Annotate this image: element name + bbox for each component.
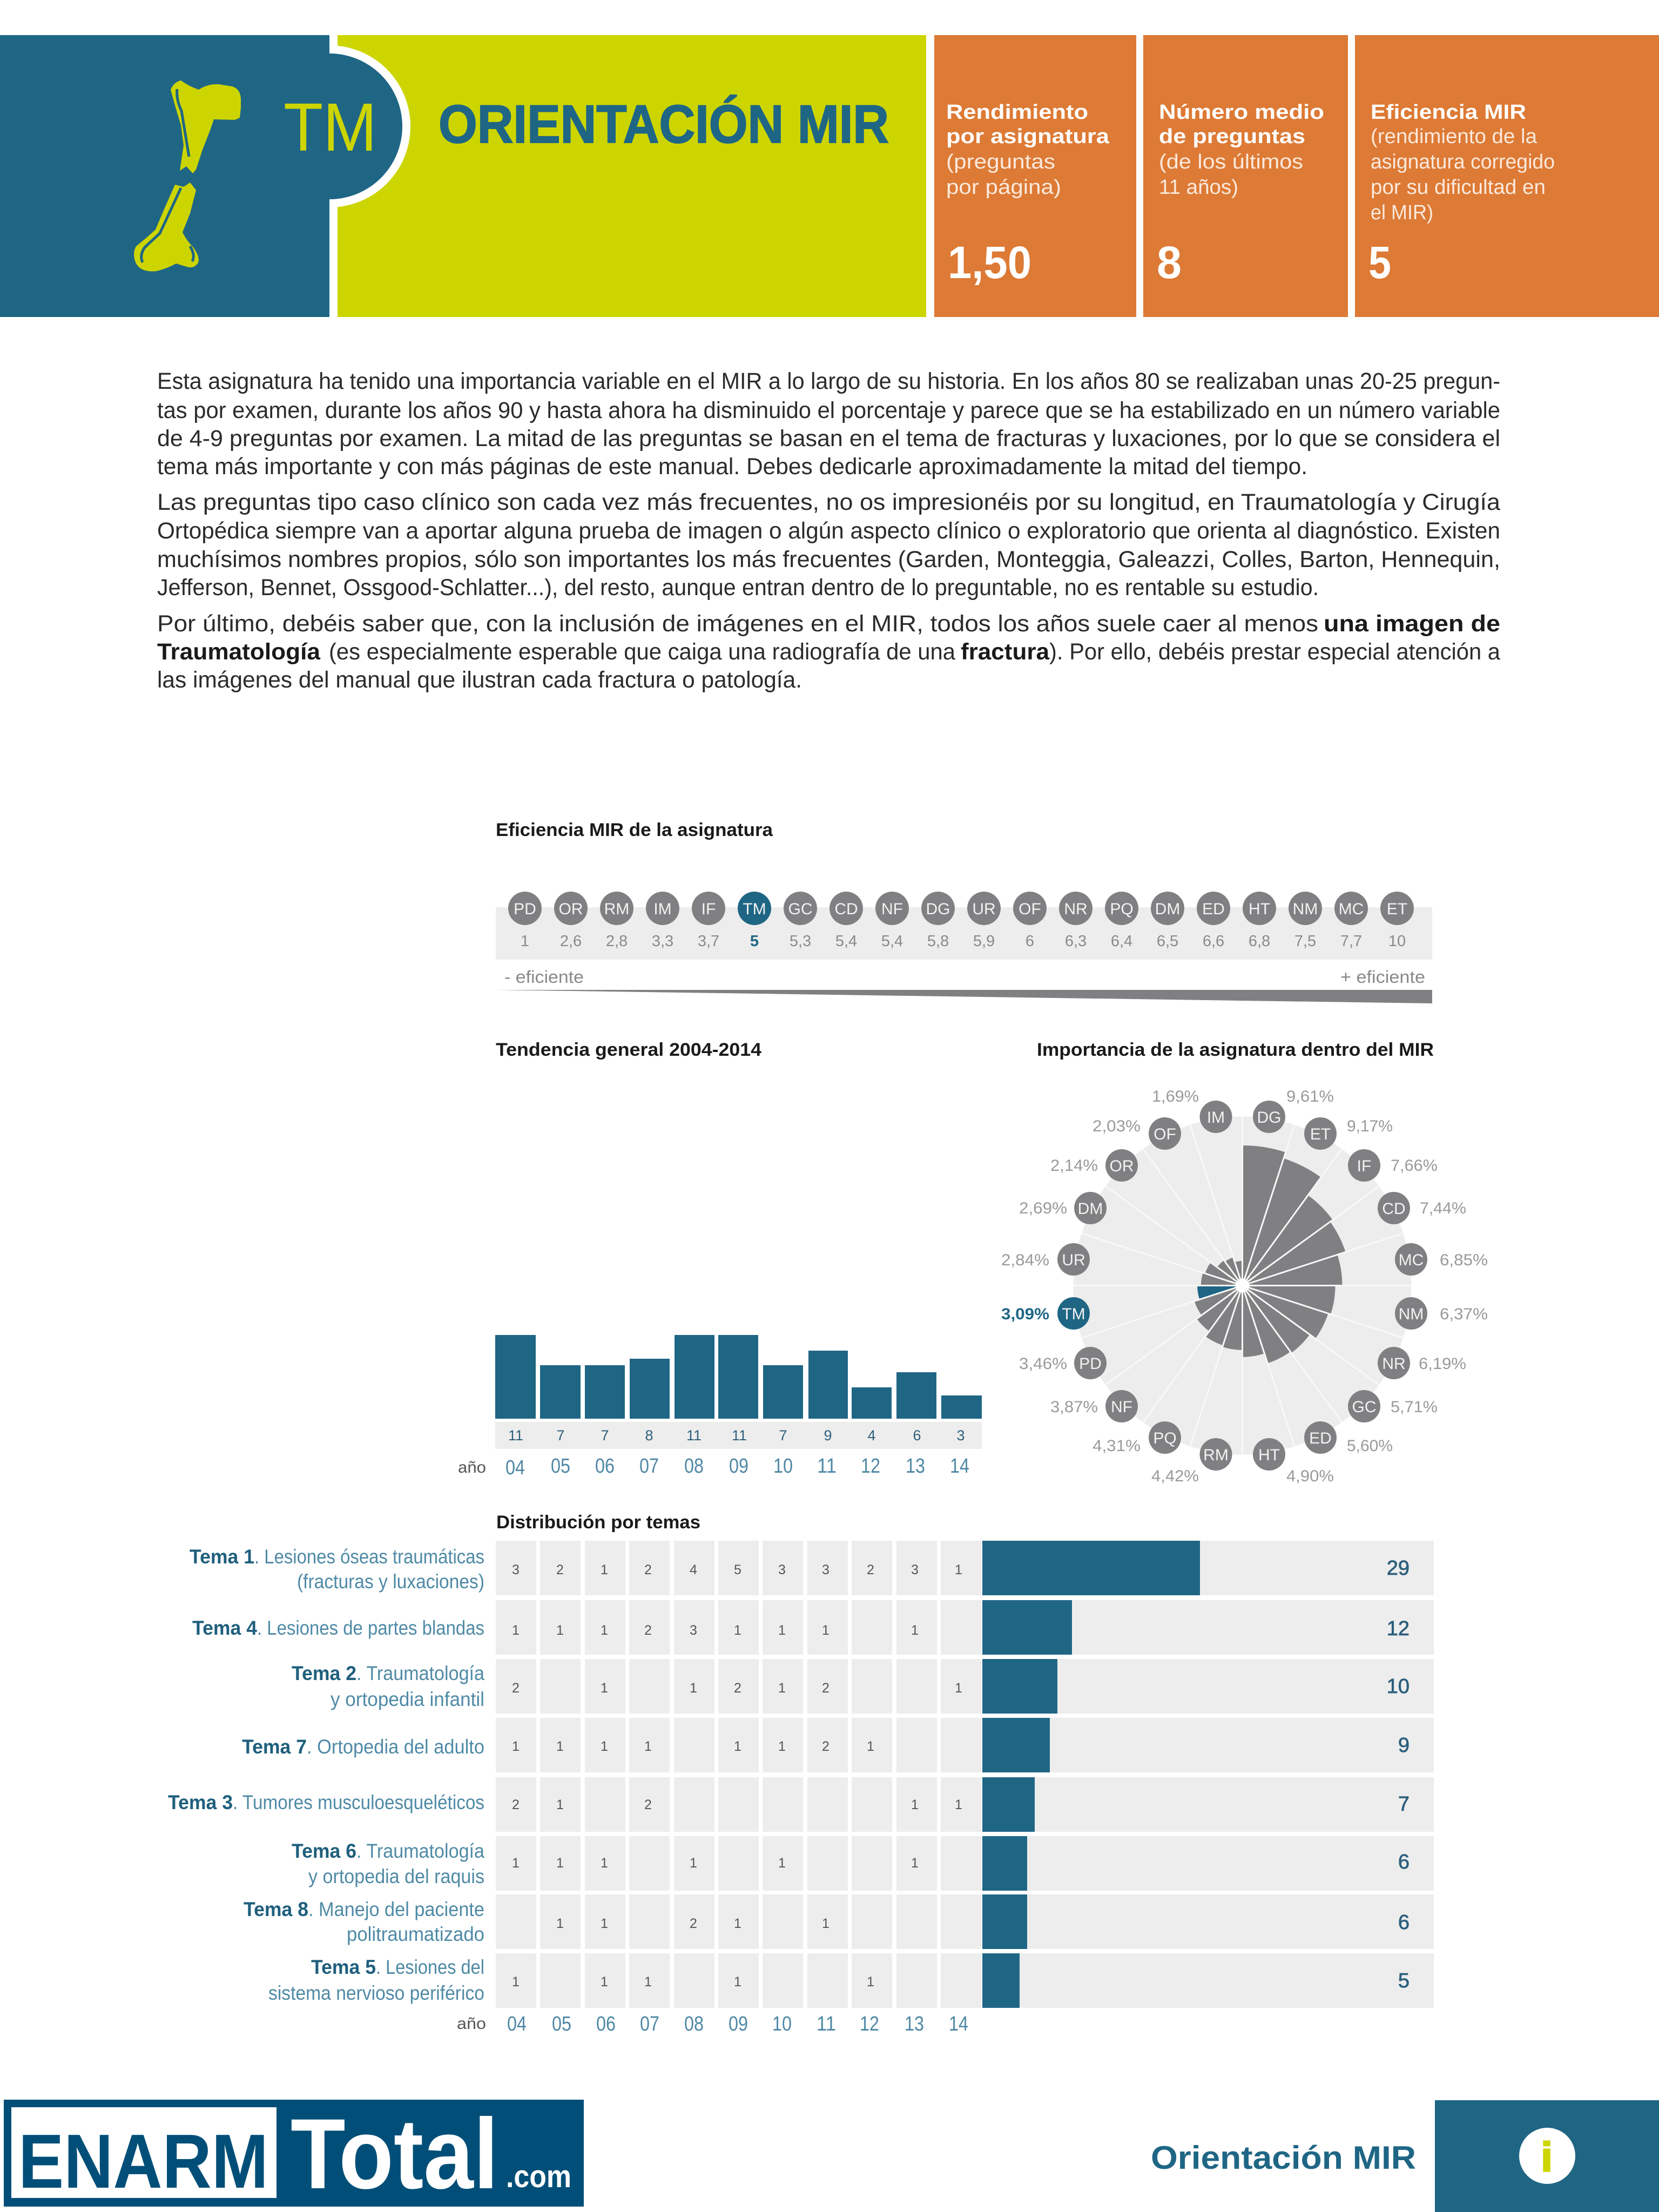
panel: rendimiento por asignatura (934, 35, 1136, 317)
grid numbers: 2 (822, 1739, 830, 1754)
year axis: 12 (861, 1455, 880, 1478)
scale band with subject circles: HT (1249, 900, 1270, 918)
bar chart (495, 1335, 982, 1419)
efficiency values: 1 (521, 933, 529, 950)
topic labels: . Lesiones de partes blandas (257, 1617, 484, 1639)
polar chart percentages: 6,85% (1440, 1251, 1488, 1269)
grid numbers: 2 (556, 1562, 564, 1577)
topic labels: . Ortopedia del adulto (307, 1736, 484, 1758)
topic labels: Tema 6 (292, 1840, 356, 1862)
grid numbers: 1 (778, 1623, 786, 1638)
year axis (458, 1455, 969, 1479)
year axis: 08 (684, 1455, 704, 1478)
paragraph 3: fractura (961, 639, 1050, 665)
polar chart subject circles: MC (1399, 1251, 1424, 1269)
year axis: 05 (552, 2013, 571, 2035)
polar chart percentages: 6,19% (1419, 1355, 1466, 1373)
efficiency values: 6,8 (1249, 933, 1270, 950)
polar chart subject circles: GC (1352, 1398, 1376, 1416)
polar chart percentages: 3,09% (1001, 1305, 1049, 1323)
paragraph 1: tema más importante y con más páginas de este manual. Debes dedicarle aproximadamente la mitad del tiempo. (157, 454, 1307, 480)
paragraph 3: una imagen de (1324, 611, 1500, 637)
logo: ENARM Total .com: .com (506, 2159, 571, 2194)
polar chart percentages: 2,84% (1001, 1251, 1049, 1269)
grid numbers: 1 (955, 1681, 962, 1696)
paragraph 3: ). Por ello, debéis prestar especial atención a (1049, 639, 1500, 665)
polar chart subject circles: OR (1109, 1157, 1134, 1175)
scale band with subject circles: GC (788, 900, 812, 918)
grid numbers: 2 (512, 1681, 520, 1696)
panel: subject tab (0, 35, 926, 317)
topic labels: . Tumores musculoesqueléticos (233, 1791, 484, 1813)
polar chart percentages: 5,71% (1391, 1398, 1438, 1416)
grid numbers: 2 (512, 1797, 520, 1812)
grid numbers: 1 (778, 1739, 786, 1754)
scale band with subject circles: TM (743, 900, 766, 918)
scale band with subject circles: UR (972, 900, 996, 918)
scale band with subject circles: NM (1293, 900, 1318, 918)
horizontal bar chart: 5 (1398, 1970, 1410, 1992)
panel: eficiencia MIR: asignatura corregido (1371, 151, 1555, 173)
icon: fractured femur bone (134, 80, 241, 271)
year grid cells (496, 1541, 981, 2008)
panel: rendimiento por asignatura: (preguntas (946, 151, 1055, 173)
efficiency values: 5,4 (881, 933, 903, 950)
grid numbers: 1 (512, 1623, 520, 1638)
year axis: 04 (505, 1456, 525, 1479)
efficiency values: 2,6 (560, 933, 582, 950)
value strip: 7 (556, 1427, 565, 1444)
polar chart subject circles: PQ (1153, 1429, 1177, 1447)
value strip: 8 (645, 1427, 653, 1444)
value strip: 9 (824, 1427, 832, 1444)
scale band with subject circles: CD (834, 900, 858, 918)
polar chart percentages: 9,17% (1347, 1117, 1393, 1135)
grid numbers: 2 (644, 1797, 652, 1812)
polar chart subject circles: RM (1203, 1446, 1229, 1464)
efficiency values (521, 933, 1406, 950)
grid numbers: 1 (734, 1739, 741, 1754)
polar chart percentages: 7,66% (1391, 1157, 1438, 1175)
grid numbers: 2 (690, 1916, 697, 1931)
horizontal bar chart: 29 (1387, 1557, 1410, 1580)
polar chart percentages: 2,14% (1050, 1157, 1098, 1175)
icon: info circle: i (1541, 2134, 1553, 2180)
horizontal bar chart: 12 (1387, 1617, 1410, 1640)
year axis: 06 (595, 1455, 615, 1478)
efficiency values: 6,4 (1111, 933, 1132, 950)
year axis: 04 (507, 2013, 527, 2035)
scale end labels: + eficiente (1340, 967, 1425, 987)
year axis: 09 (729, 2013, 748, 2035)
scale band with subject circles: NR (1064, 900, 1088, 918)
year axis: año (457, 2015, 486, 2033)
paragraph 1 (157, 368, 1500, 480)
efficiency values: 6,3 (1065, 933, 1087, 950)
icon: info circle (1519, 2128, 1575, 2184)
grid numbers: 1 (512, 1856, 520, 1871)
topic labels: . Traumatología (356, 1662, 484, 1684)
grid numbers: 1 (867, 1739, 874, 1754)
year axis: 07 (640, 2013, 659, 2035)
value strip: 7 (601, 1427, 609, 1444)
subject code: TM (284, 89, 377, 165)
polar chart subject circles: PD (1079, 1355, 1102, 1373)
scale band with subject circles: DM (1155, 900, 1180, 918)
horizontal bar chart: 9 (1398, 1734, 1410, 1757)
topic labels: politraumatizado (347, 1923, 484, 1945)
polar chart percentages (1001, 1088, 1488, 1485)
value strip: 11 (732, 1427, 747, 1444)
panel: eficiencia MIR de la asignatura (496, 820, 1432, 1003)
heading: Importancia de la asignatura dentro del MIR (1037, 1040, 1434, 1060)
grid numbers: 1 (734, 1623, 741, 1638)
grid numbers: 1 (911, 1623, 919, 1638)
polar chart subject circles: ED (1309, 1429, 1332, 1447)
panel: eficiencia MIR: por su dificultad en (1371, 176, 1546, 199)
panel: número medio de preguntas: 8 (1157, 237, 1182, 288)
panel: eficiencia MIR: Eficiencia MIR (1371, 101, 1526, 124)
panel: eficiencia MIR: el MIR) (1371, 201, 1433, 224)
paragraph 3: Traumatología (157, 639, 321, 665)
grid numbers: 1 (601, 1856, 608, 1871)
scale band with subject circles: OF (1019, 900, 1041, 918)
scale end labels: - eficiente (504, 967, 584, 987)
topic labels: Tema 1 (190, 1546, 254, 1568)
year axis: 06 (596, 2013, 616, 2035)
polar chart (1074, 1117, 1412, 1455)
panel: eficiencia MIR: (rendimiento de la (1371, 125, 1537, 148)
panel: distribución por temas (168, 1512, 1434, 2035)
efficiency values: 6,5 (1157, 933, 1178, 950)
polar chart subject circles: NR (1382, 1355, 1406, 1373)
topic labels: . Traumatología (356, 1840, 484, 1862)
polar chart subject circles: IF (1357, 1157, 1371, 1175)
footer label: Orientación MIR (1151, 2140, 1416, 2176)
panel: importancia de la asignatura (1001, 1040, 1488, 1485)
efficiency values: 7,7 (1340, 933, 1362, 950)
scale band with subject circles: PQ (1110, 900, 1134, 918)
grid numbers: 2 (867, 1562, 874, 1577)
year axis: 12 (860, 2013, 879, 2035)
grid numbers: 1 (601, 1623, 608, 1638)
panel: número medio de preguntas: Número medio (1159, 101, 1324, 124)
panel: tendencia general (458, 1040, 982, 1479)
horizontal bar chart: 10 (1387, 1675, 1410, 1698)
efficiency values: 5,3 (790, 933, 811, 950)
topic labels: Tema 5 (311, 1956, 376, 1978)
paragraph 2: Las preguntas tipo caso clínico son cada vez más frecuentes, no os impresionéis por su longitud, en Traumatología y Cirugía (157, 489, 1500, 515)
topic labels: Tema 4 (192, 1617, 257, 1639)
year axis: 05 (551, 1455, 570, 1478)
value strip: 6 (913, 1427, 921, 1444)
scale band with subject circles: MC (1339, 900, 1364, 918)
grid numbers: 1 (601, 1562, 608, 1577)
grid numbers: 1 (822, 1916, 830, 1931)
grid numbers: 1 (556, 1916, 564, 1931)
panel: número medio de preguntas: 11 años) (1159, 176, 1238, 199)
scale band with subject circles: IF (702, 900, 716, 918)
polar chart subject circles: DG (1257, 1109, 1281, 1127)
grid numbers: 2 (822, 1681, 830, 1696)
polar chart percentages: 2,03% (1092, 1117, 1141, 1135)
paragraph 2: Jefferson, Bennet, Ossgood-Schlatter...), del resto, aunque entran dentro de lo preguntable, no es rentable su estudio. (157, 575, 1319, 601)
value strip: 11 (508, 1427, 523, 1444)
grid numbers: 1 (556, 1739, 564, 1754)
year axis: 09 (729, 1455, 748, 1478)
horizontal bar chart: 6 (1398, 1911, 1410, 1934)
scale end labels (504, 967, 1425, 987)
value strip: 7 (779, 1427, 787, 1444)
topic labels: . Lesiones óseas traumáticas (254, 1546, 484, 1568)
title: ORIENTACIÓN MIR (439, 94, 889, 154)
topic labels (168, 1546, 484, 2004)
grid numbers: 1 (556, 1856, 564, 1871)
year axis: 07 (639, 1455, 659, 1478)
paragraph 3: las imágenes del manual que ilustran cada fractura o patología. (157, 667, 802, 693)
panel: rendimiento por asignatura: por asignatura (946, 125, 1110, 148)
polar chart subject circles (1057, 1101, 1427, 1471)
polar chart subject circles: HT (1258, 1446, 1280, 1464)
value strip: 3 (956, 1427, 965, 1444)
topic labels: Tema 2 (292, 1662, 356, 1684)
polar chart subject circles: UR (1062, 1251, 1085, 1269)
topic labels: . Lesiones del (376, 1956, 484, 1978)
grid numbers: 1 (601, 1681, 608, 1696)
grid numbers: 1 (911, 1856, 919, 1871)
value strip (495, 1422, 982, 1449)
grid numbers: 1 (601, 1739, 608, 1754)
paragraph 1: de 4-9 preguntas por examen. La mitad de las preguntas se basan en el tema de fracturas y luxaciones, por lo que se considera el (157, 426, 1500, 451)
scale band with subject circles: OR (558, 900, 583, 918)
polar chart percentages: 3,87% (1050, 1398, 1098, 1416)
panel: número medio de preguntas: (de los últimos (1159, 151, 1303, 173)
polar chart percentages: 5,60% (1347, 1437, 1393, 1455)
scale band with subject circles: RM (604, 900, 629, 918)
efficiency values: 5,9 (973, 933, 995, 950)
year axis: 14 (950, 1455, 969, 1478)
grid numbers: 1 (822, 1623, 830, 1638)
topic labels: y ortopedia del raquis (308, 1865, 484, 1887)
year axis: 08 (684, 2013, 704, 2035)
grid numbers: 5 (734, 1562, 741, 1577)
scale band with subject circles: ED (1202, 900, 1225, 918)
paragraph 1: tas por examen, durante los años 90 y hasta ahora ha disminuido el porcentaje y parece que se ha estabilizado en un número variable (157, 397, 1500, 423)
grid numbers: 1 (512, 1739, 520, 1754)
panel: rendimiento por asignatura: 1,50 (948, 237, 1031, 288)
grid numbers: 3 (778, 1562, 786, 1577)
grid numbers: 1 (955, 1797, 962, 1812)
scale wedge (496, 990, 1432, 1003)
polar chart subject circles: NM (1399, 1305, 1424, 1323)
polar chart percentages: 2,69% (1019, 1199, 1067, 1217)
polar chart percentages: 1,69% (1152, 1088, 1199, 1105)
topic labels: (fracturas y luxaciones) (297, 1570, 484, 1593)
logo: ENARM Total .com: ENARM (18, 2119, 268, 2204)
grid numbers: 1 (556, 1797, 564, 1812)
grid numbers: 1 (867, 1974, 874, 1990)
heading: Distribución por temas (496, 1512, 700, 1533)
grid numbers: 1 (690, 1681, 697, 1696)
grid numbers: 1 (778, 1681, 786, 1696)
grid numbers: 2 (644, 1562, 652, 1577)
polar chart subject circles: ET (1310, 1125, 1331, 1143)
polar chart percentages: 7,44% (1420, 1199, 1466, 1217)
horizontal bar chart: 7 (1398, 1793, 1410, 1816)
grid numbers: 1 (556, 1623, 564, 1638)
panel: eficiencia MIR: 5 (1368, 237, 1391, 288)
year axis: 10 (773, 1455, 793, 1478)
footer info tab (1435, 2100, 1659, 2212)
year axis: 11 (817, 1455, 837, 1478)
year axis: año (458, 1459, 486, 1476)
grid numbers: 1 (911, 1797, 919, 1812)
scale band with subject circles: DG (926, 900, 950, 918)
horizontal bar chart: 6 (1398, 1851, 1410, 1873)
topic labels: Tema 7 (242, 1736, 307, 1758)
polar chart subject circles: DM (1078, 1200, 1103, 1218)
year axis: 14 (949, 2013, 968, 2035)
efficiency values: 2,8 (606, 933, 628, 950)
paragraph 2: muchísimos nombres propios, sólo son importantes los más frecuentes (Garden, Monteggia, Galeazzi, Colles, Barton, Hennequin, (157, 547, 1500, 572)
grid numbers: 1 (690, 1856, 697, 1871)
efficiency values: 5,4 (835, 933, 857, 950)
topic labels: Tema 3 (168, 1791, 233, 1813)
paragraph 3 (157, 611, 1500, 693)
polar chart subject circles: TM (1062, 1305, 1085, 1323)
grid numbers: 2 (644, 1623, 652, 1638)
scale band with subject circles: IM (653, 900, 672, 918)
heading: Tendencia general 2004-2014 (496, 1040, 761, 1060)
text block: introduction (157, 368, 1500, 693)
header band (0, 35, 1659, 317)
panel: rendimiento por asignatura: Rendimiento (946, 101, 1088, 124)
polar chart percentages: 4,31% (1092, 1437, 1141, 1455)
efficiency values: 5,8 (927, 933, 949, 950)
panel: rendimiento por asignatura: por página) (946, 176, 1061, 199)
paragraph 1: Esta asignatura ha tenido una importancia variable en el MIR a lo largo de su historia. En los años 80 se realizaban unas 20-25 pregun- (157, 368, 1500, 394)
grid numbers (512, 1562, 962, 1990)
year axis (457, 2013, 968, 2035)
scale band with subject circles: NF (881, 900, 903, 918)
panel: eficiencia MIR (1355, 35, 1659, 317)
paragraph 3: (es especialmente esperable que caiga una radiografía de una (329, 639, 955, 665)
grid numbers: 3 (911, 1562, 919, 1577)
topic labels: . Manejo del paciente (308, 1898, 484, 1920)
grid numbers: 1 (955, 1562, 962, 1577)
scale band with subject circles: PD (514, 900, 536, 918)
year axis: 13 (906, 1455, 925, 1478)
polar chart subject circles: OF (1154, 1125, 1176, 1143)
polar chart percentages: 4,42% (1151, 1467, 1199, 1485)
topic labels: sistema nervioso periférico (268, 1982, 484, 2004)
panel: número medio de preguntas: de preguntas (1159, 125, 1305, 148)
value strip: 11 (686, 1427, 702, 1444)
heading: Eficiencia MIR de la asignatura (496, 820, 773, 840)
grid numbers: 1 (778, 1856, 786, 1871)
efficiency values: 6,6 (1203, 933, 1224, 950)
efficiency values: 3,3 (652, 933, 673, 950)
grid numbers: 3 (690, 1623, 697, 1638)
efficiency values: 5 (750, 933, 759, 950)
paragraph 3: Por último, debéis saber que, con la inclusión de imágenes en el MIR, todos los años suele caer al menos (157, 611, 1318, 637)
year axis: 10 (772, 2013, 792, 2035)
efficiency values: 3,7 (698, 933, 719, 950)
value strip: 4 (867, 1427, 876, 1444)
grid numbers: 3 (822, 1562, 830, 1577)
grid numbers: 1 (644, 1974, 652, 1990)
paragraph 2: Ortopédica siempre van a aportar alguna prueba de imagen o algún aspecto clínico o exploratorio que orienta al diagnóstico. Existen (157, 518, 1500, 544)
scale band with subject circles (496, 892, 1432, 960)
grid numbers: 1 (734, 1974, 741, 1990)
grid numbers: 1 (601, 1916, 608, 1931)
polar chart percentages: 6,37% (1440, 1305, 1488, 1323)
year axis: 11 (817, 2013, 836, 2035)
grid numbers: 1 (512, 1974, 520, 1990)
grid numbers: 1 (601, 1974, 608, 1990)
grid numbers: 4 (690, 1562, 697, 1577)
logo: ENARM Total .com: Total (291, 2099, 498, 2210)
topic labels: y ortopedia infantil (331, 1688, 484, 1710)
horizontal bar chart (982, 1541, 1434, 2008)
polar chart subject circles: IM (1207, 1109, 1225, 1127)
efficiency values: 7,5 (1294, 933, 1316, 950)
efficiency values: 10 (1388, 933, 1406, 950)
polar chart percentages: 9,61% (1286, 1088, 1334, 1105)
polar chart subject circles: NF (1111, 1398, 1132, 1416)
grid numbers: 3 (512, 1562, 520, 1577)
year axis: 13 (905, 2013, 924, 2035)
topic labels: Tema 8 (244, 1898, 308, 1920)
efficiency values: 6 (1026, 933, 1034, 950)
polar chart percentages: 3,46% (1019, 1355, 1067, 1373)
scale band with subject circles: ET (1387, 900, 1407, 918)
grid numbers: 1 (644, 1739, 652, 1754)
polar chart subject circles: CD (1382, 1200, 1406, 1218)
grid numbers: 2 (734, 1681, 741, 1696)
paragraph 2 (157, 489, 1500, 601)
panel: número medio de preguntas (1143, 35, 1348, 317)
logo: ENARM Total .com (4, 2099, 584, 2210)
polar chart percentages: 4,90% (1286, 1467, 1334, 1485)
grid numbers: 1 (734, 1916, 741, 1931)
